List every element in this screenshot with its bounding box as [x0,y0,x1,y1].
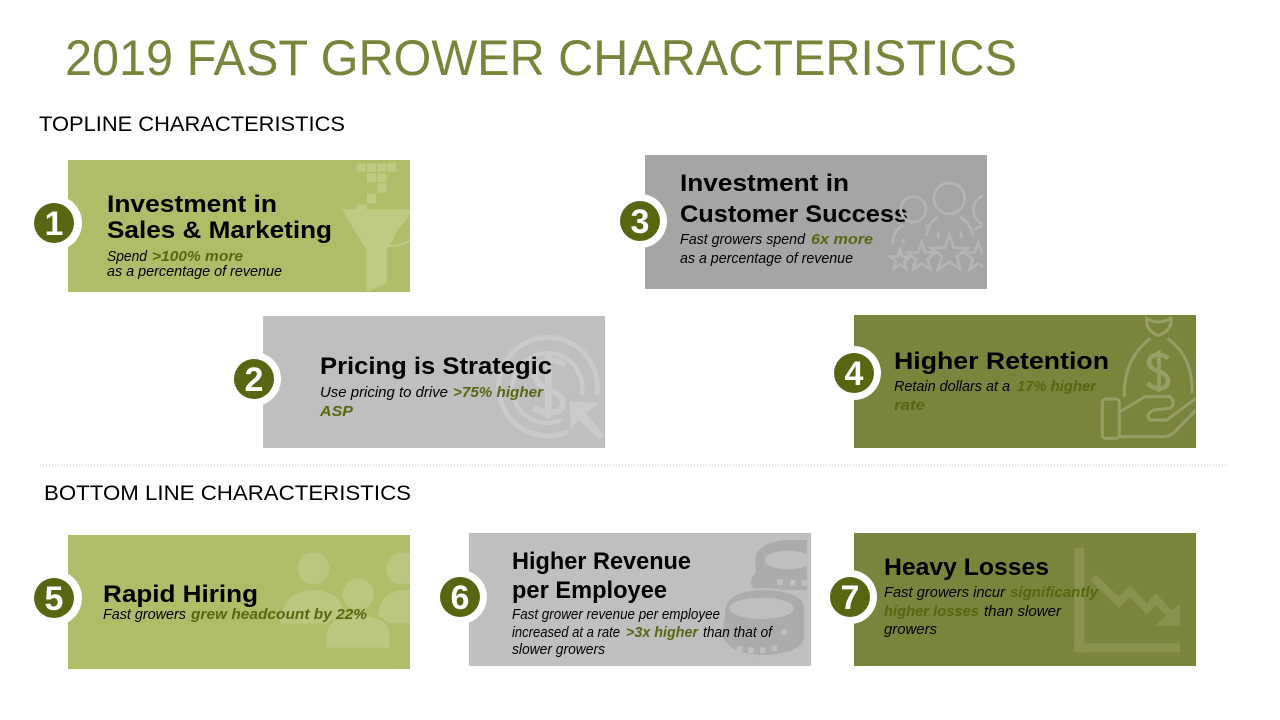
panel: investment in sales and marketing [26,160,413,292]
card description [319,384,544,420]
card description: >100% more [152,248,243,265]
number badge 1: 1 [45,205,63,243]
card description: significantly [1010,584,1099,601]
card heading: Customer Success [680,201,908,228]
card description: >3x higher [626,624,699,641]
number badge 2 [227,352,281,406]
card description [103,606,367,623]
panel: higher retention [827,315,1196,448]
icon: declining chart [1074,548,1180,652]
card description: higher losses [884,603,979,620]
card description: ASP [319,403,354,420]
card description: slower growers [512,641,605,658]
panel: pricing is strategic [227,316,606,448]
card heading: Pricing is Strategic [320,353,552,380]
number badge 6: 6 [451,579,469,617]
card heading: per Employee [512,577,667,604]
card description: than slower [984,603,1062,620]
number badge 7 [823,570,877,624]
card description: than that of [703,624,774,641]
card heading: Rapid Hiring [103,581,258,608]
card heading: Investment in [680,170,849,197]
card heading: Heavy Losses [884,554,1049,581]
card background [469,533,811,666]
number badge 3: 3 [631,203,649,241]
card background [263,316,605,448]
card description [512,606,774,658]
card description: as a percentage of revenue [107,263,282,280]
icon: dollar target with cursor [499,337,606,442]
title: 2019 FAST GROWER CHARACTERISTICS [65,30,1017,86]
card background [68,535,410,669]
card description [884,584,1099,638]
card background [854,315,1196,448]
number badge 7: 7 [841,579,859,617]
number badge 5: 5 [45,580,63,618]
panel: heavy losses [823,533,1196,666]
card background [854,533,1196,666]
number badge 2: 2 [245,361,263,399]
card description: increased at a rate [512,624,620,641]
number badge 3 [613,194,667,248]
card heading: Higher Retention [894,348,1109,375]
icon: group of people [280,552,418,649]
card description: Fast grower revenue per employee [512,606,720,623]
card description: rate [894,397,925,414]
icon: money bag in hand [1102,318,1196,438]
icon: customers and stars [886,182,983,272]
number badge 1 [26,195,82,251]
number badge 5 [26,570,82,626]
card heading: Investment in [107,191,277,218]
panel: rapid hiring [26,535,418,669]
card heading: Sales & Marketing [107,217,332,244]
panel: investment in customer success [613,155,1003,289]
card heading: Higher Revenue [512,548,691,575]
card background [68,160,410,292]
card description: 6x more [811,231,873,248]
card heading [512,548,691,604]
card description: grew headcount by 22% [190,606,367,623]
heading: topline characteristics: TOPLINE CHARACTERISTICS [39,113,345,136]
icon: funnel [342,163,413,292]
card description [107,248,282,280]
card description: >75% higher [453,384,544,401]
card description: 17% higher [1017,378,1097,395]
card description: Fast growers [103,606,186,623]
card description: Fast growers spend [680,231,806,248]
card description: Spend [107,248,148,265]
number badge 6 [433,570,487,624]
heading: bottom line characteristics: BOTTOM LINE CHARACTERISTICS [44,482,411,505]
card description [680,231,873,267]
icon: coin stacks [722,540,812,656]
card description: Fast growers incur [884,584,1006,601]
card description: Retain dollars at a [894,378,1010,395]
number badge 4: 4 [845,355,864,393]
card background [645,155,987,289]
card description: as a percentage of revenue [680,250,853,267]
panel: higher revenue per employee [433,533,812,666]
card heading [107,191,332,244]
card heading [680,170,908,228]
card description: Use pricing to drive [320,384,448,401]
card description [894,378,1097,414]
card description: growers [884,621,937,638]
number badge 4 [827,346,881,400]
